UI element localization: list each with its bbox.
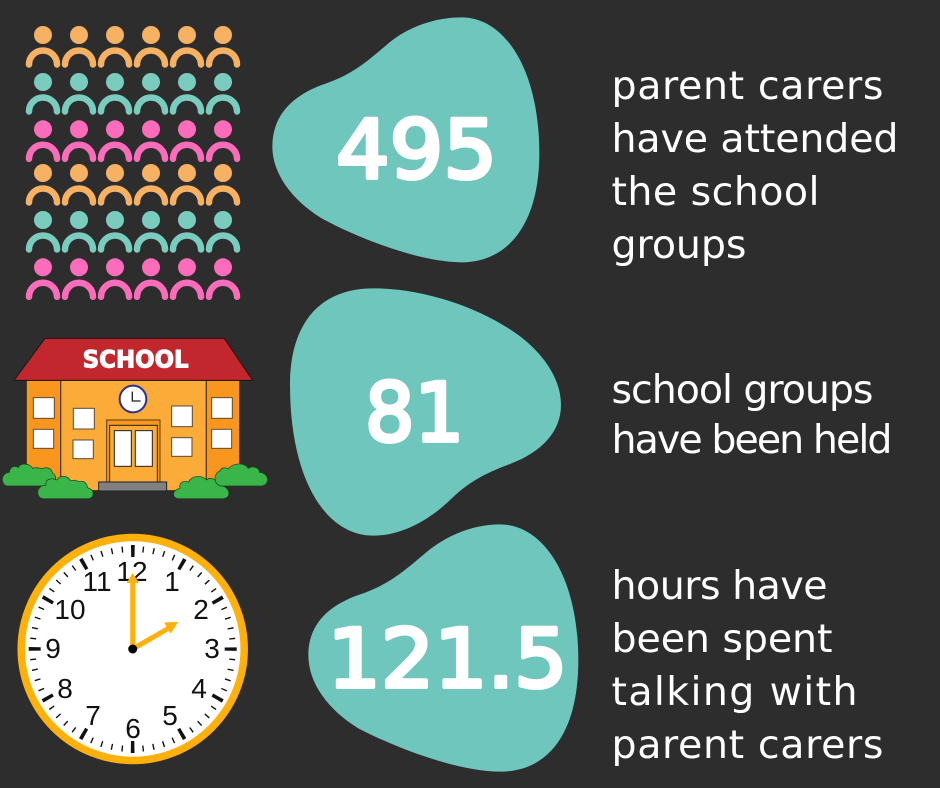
text: parent carers attended xyxy=(612,63,898,268)
icon: clock: 7 xyxy=(85,700,101,731)
text: hours spent: parent carers xyxy=(612,722,884,768)
icon: clock: 12 xyxy=(116,556,148,587)
blob: 121.5 xyxy=(308,524,578,772)
text: hours spent: been spent xyxy=(612,616,832,662)
icon: school building xyxy=(2,338,268,499)
text: school groups held: school groups xyxy=(612,367,874,413)
icon: school building: SCHOOL xyxy=(83,346,189,374)
text: hours spent: hours have xyxy=(612,563,828,609)
icon: clock: 9 xyxy=(45,633,61,664)
icon: clock: 4 xyxy=(191,673,207,704)
text: school groups held: have been held xyxy=(612,417,892,463)
text: hours spent: talking with xyxy=(612,669,858,715)
text: parent carers attended: parent carers xyxy=(612,63,884,109)
icon: clock: 1 xyxy=(164,566,180,597)
icon: clock: 5 xyxy=(162,700,178,731)
text: school groups held xyxy=(612,367,892,463)
icon: clock: 6 xyxy=(125,713,141,744)
text: parent carers attended: groups xyxy=(612,222,746,268)
text: hours spent xyxy=(612,563,884,768)
icon: clock: 3 xyxy=(204,633,220,664)
icon: clock: 2 xyxy=(193,594,209,625)
icon: grid of people xyxy=(29,26,237,297)
blob: 495 xyxy=(272,17,539,262)
text: parent carers attended: have attended xyxy=(612,116,898,162)
icon: clock: 11 xyxy=(82,566,112,597)
blob: 121.5: 121.5 xyxy=(328,613,568,707)
blob: 495: 495 xyxy=(336,104,497,198)
blob: 81: 81 xyxy=(365,367,464,461)
icon: clock xyxy=(21,538,244,760)
blob: 81 xyxy=(290,288,561,536)
text: parent carers attended: the school xyxy=(612,169,820,215)
icon: clock: 8 xyxy=(57,673,73,704)
icon: clock: 10 xyxy=(54,594,86,625)
